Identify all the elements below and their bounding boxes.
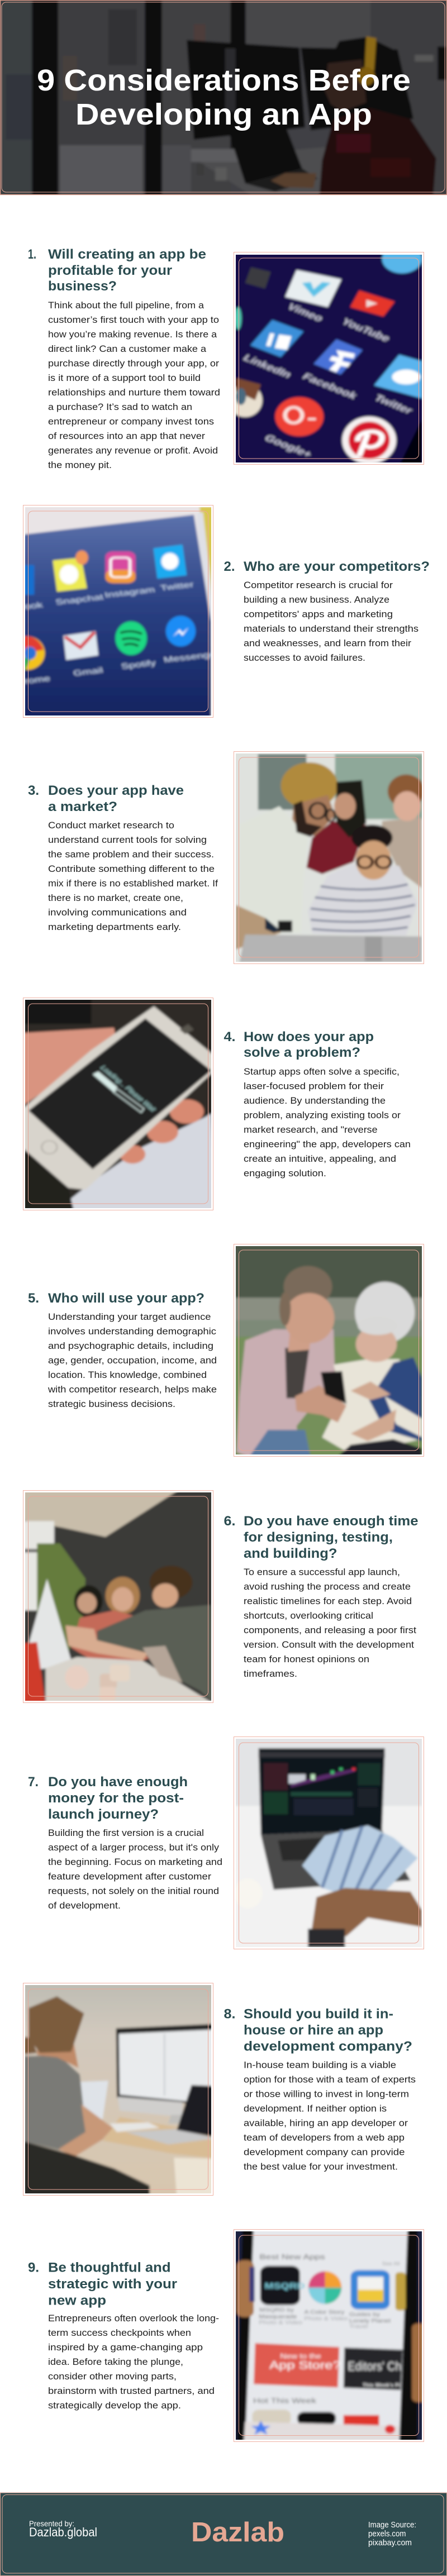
heading 1: Will creating an app be [48, 247, 206, 262]
photo 3: team around laptop [228, 750, 434, 965]
body text 8: In-house team building is a viable [244, 2060, 396, 2070]
body text 7: of development. [48, 1900, 121, 1911]
photo 9: App Store on phone: Guides by [349, 2312, 381, 2317]
body text 3: marketing departments early. [48, 922, 181, 932]
body text 2: successes to avoid failures. [244, 652, 365, 663]
photo 9: App Store on phone: A Color Story [304, 2310, 345, 2315]
body text 5: location. This knowledge, combined [48, 1370, 207, 1380]
body text 6: components, and releasing a poor first [244, 1625, 416, 1635]
image sources: pexels.com [368, 2529, 406, 2539]
body text 4: create an intuitive, appealing, and [244, 1153, 396, 1164]
photo 9: App Store on phone: Photo & Video [259, 2320, 302, 2325]
heading 3 [28, 783, 184, 814]
hero photo: developer at desk by window [0, 0, 447, 199]
body text 8: development. If neither option is [244, 2103, 387, 2114]
heading 9: strategic with your [48, 2277, 177, 2292]
body text 8: team of developers from a web app [244, 2133, 405, 2143]
item 5: audience [28, 1242, 434, 1458]
body text 8: available, hiring an app developer or [244, 2118, 408, 2128]
heading 2: Who are your competitors? [244, 559, 430, 574]
photo 1: social app icons on phone: Facebook [300, 371, 360, 401]
presented by: Presented by: [29, 2519, 74, 2528]
body text 1: how you’re making revenue. Is there a [48, 329, 217, 340]
heading 6: and building? [244, 1546, 337, 1561]
photo 2: tablet with app icons: Spotify [120, 658, 157, 671]
photo 2: tablet with app icons: Messenger [163, 649, 221, 664]
body text 6: realistic timelines for each step. Avoid [244, 1596, 412, 1606]
photo 2: tablet with app icons: Instagram [103, 585, 156, 599]
body text 4: Startup apps often solve a specific, [244, 1066, 400, 1077]
item 4: solve a problem [17, 996, 411, 1212]
photo 9: App Store on phone: Hot This Week [253, 2397, 316, 2405]
photo 1: social app icons on phone: Twitter [372, 393, 415, 416]
body text 5: Understanding your target audience [48, 1311, 211, 1322]
body text 7: aspect of a larger process, but it's only [48, 1842, 220, 1853]
heading 3: Does your app have [48, 783, 184, 798]
heading 7: Do you have enough [48, 1774, 188, 1790]
body text 1: purchase directly through your app, or [48, 358, 219, 369]
body text 2: and weaknesses, and learn from their [244, 638, 411, 648]
body text 1: a purchase? It’s sad to watch an [48, 402, 192, 412]
heading 7 [28, 1774, 188, 1822]
body text 7 [48, 1828, 222, 1911]
body text 2: competitors' apps and marketing [244, 609, 393, 619]
title [37, 64, 411, 131]
photo 9: App Store on phone [234, 2229, 424, 2442]
photo 2: tablet with app icons: Gmail [72, 666, 104, 678]
body text 7: the beginning. Focus on marketing and [48, 1857, 222, 1867]
heading 7: 7. [28, 1774, 39, 1790]
photo 9: App Store on phone: Masquerade [259, 2314, 297, 2320]
heading 6: Do you have enough time [244, 1514, 418, 1529]
body text 2 [244, 580, 419, 663]
heading 4: 4. [224, 1029, 236, 1044]
heading 1 [28, 247, 206, 294]
body text 3: Conduct market research to [48, 820, 174, 831]
heading 7: launch journey? [48, 1807, 159, 1822]
photo 1: social app icons on phone: YouTube [339, 317, 392, 344]
photo 2: tablet with app icons: Snapchat [55, 593, 104, 607]
body text 6: To ensure a successful app launch, [244, 1567, 400, 1577]
heading 1: profitable for your [48, 263, 172, 278]
photo 2: tablet with app icons: Twitter [159, 580, 195, 592]
photo 9: App Store on phone: Editors' Ch [348, 2360, 401, 2373]
item 8: in-house or hire [17, 1981, 416, 2197]
photo 9: App Store on phone: Lonely Planet [349, 2318, 391, 2324]
heading 9: Be thoughtful and [48, 2260, 171, 2276]
body text 6: version. Consult with the development [244, 1639, 414, 1650]
body text 9: inspired by a game-changing app [48, 2342, 203, 2353]
body text 1: entrepreneur or company invest tons [48, 416, 214, 427]
image sources: pixabay.com [368, 2538, 412, 2548]
body text 3: Contribute something different to the [48, 864, 215, 874]
image sources: Image Source: [368, 2520, 416, 2530]
logo: Dazlab [191, 2517, 284, 2548]
item 7: money [28, 1735, 434, 1949]
photo 2: tablet with app icons: rome [23, 674, 51, 685]
title: 9 Considerations Before [37, 64, 411, 97]
body text 6: timeframes. [244, 1668, 297, 1679]
body text 9: consider other moving parts, [48, 2371, 177, 2382]
photo 1: social app icons on phone: LinkedIn [241, 353, 294, 380]
heading 3: 3. [28, 783, 39, 798]
body text 5: involves understanding demographic [48, 1326, 217, 1337]
photo 9: App Store on phone: MSQRD by [259, 2307, 294, 2313]
heading 8: house or hire an app [244, 2023, 383, 2038]
heading 6: for designing, testing, [244, 1530, 393, 1545]
body text 5: strategic business decisions. [48, 1399, 175, 1409]
body text 4 [244, 1066, 411, 1179]
photo 7: laptop with trading chart and banknotes [228, 1735, 434, 1949]
body text 8: option for those with a team of experts [244, 2074, 416, 2084]
body text 7: Building the first version is a crucial [48, 1828, 204, 1838]
body text 1: direct link? Can a customer make a [48, 344, 207, 354]
item 9: be thoughtful [28, 2225, 434, 2446]
body text 4: problem, analyzing existing tools or [244, 1110, 401, 1120]
heading 8: Should you build it in- [244, 2006, 393, 2022]
photo 6: coworkers at desk in dark office [17, 1487, 222, 1705]
heading 3: a market? [48, 799, 117, 814]
presented by: Dazlab.global [29, 2525, 97, 2539]
body text 3: the same problem and their success. [48, 849, 214, 860]
body text 9: brainstorm with trusted partners, and [48, 2386, 215, 2396]
body text 2: Competitor research is crucial for [244, 580, 393, 590]
title: Developing an App [75, 98, 372, 131]
photo 4: hand holding phone loading [17, 996, 222, 1212]
body text 6: avoid rushing the process and create [244, 1581, 411, 1592]
body text 7: requests, not solely on the initial round [48, 1886, 219, 1896]
body text 1: is it more of a support tool to build [48, 373, 201, 383]
footer panel [0, 2493, 447, 2576]
photo 9: App Store on phone: Best New Apps [259, 2253, 325, 2261]
body text 7: feature development after customer [48, 1871, 211, 1882]
heading 6 [224, 1514, 418, 1561]
presented by [29, 2519, 97, 2539]
body text 1: the money pit. [48, 460, 112, 470]
photo 2: tablet with app icons [23, 505, 213, 718]
heading 9: new app [48, 2293, 106, 2308]
body text 3 [48, 820, 218, 932]
item 2: competitors [9, 503, 430, 721]
body text 6: team for honest opinions on [244, 1654, 369, 1664]
body text 1: relationships and nurture them toward [48, 387, 220, 398]
body text 2: materials to understand their strengths [244, 623, 419, 634]
heading 9: 9. [28, 2260, 39, 2276]
body text 3: involving communications and [48, 907, 187, 918]
heading 4 [224, 1029, 374, 1060]
photo 1: social app icons on phone: Vimeo [285, 302, 326, 323]
photo 9: App Store on phone: New to the [280, 2353, 321, 2360]
body text 4: audience. By understanding the [244, 1095, 386, 1106]
photo 9: App Store on phone: Photo & Video [304, 2316, 348, 2322]
heading 6: 6. [224, 1514, 236, 1529]
body text 9: Entrepreneurs often overlook the long- [48, 2313, 219, 2324]
item 6: time [17, 1487, 418, 1705]
photo 8: man at desk with monitor and laptops [17, 1981, 222, 2197]
photo 1: social app icons on phone: Google+ [262, 433, 315, 460]
heading 4: solve a problem? [244, 1045, 360, 1060]
heading 8: 8. [224, 2006, 236, 2022]
heading 7: money for the post- [48, 1791, 184, 1806]
body text 1: customer’s first touch with your app to [48, 314, 219, 325]
body text 6: shortcuts, overlooking critical [244, 1610, 373, 1621]
photo 9: App Store on phone: Travel [349, 2324, 368, 2329]
hero banner [0, 0, 447, 199]
photo 1: social app icons on phone [228, 244, 427, 468]
photo 2: tablet with app icons: ook [23, 600, 44, 611]
heading 2: 2. [224, 559, 235, 574]
body text 8: or those willing to invest in long-term [244, 2089, 409, 2099]
photo 5: two women with smartphone [228, 1242, 434, 1458]
body text 4: engaging solution. [244, 1168, 326, 1179]
heading 8: development company? [244, 2039, 412, 2054]
photo 9: App Store on phone: MSQRD [264, 2281, 305, 2291]
body text 9: term success checkpoints when [48, 2327, 191, 2338]
item 1: profitability [28, 244, 427, 470]
body text 4: engineering" the app, developers can [244, 1139, 411, 1149]
item 3: market [28, 750, 434, 965]
body text 8: the best value for your investment. [244, 2162, 398, 2172]
body text 1 [48, 300, 220, 470]
body text 3: understand current tools for solving [48, 834, 207, 845]
body text 6 [244, 1567, 416, 1679]
body text 8: development company can provide [244, 2147, 405, 2157]
body text 4: market research, and "reverse [244, 1124, 378, 1135]
heading 5: Who will use your app? [48, 1291, 205, 1306]
body text 8 [244, 2060, 416, 2172]
body text 5: and psychographic details, including [48, 1341, 213, 1351]
body text 3: mix if there is no established market. If [48, 878, 218, 889]
body text 2: building a new business. Analyze [244, 594, 389, 605]
body text 5 [47, 1311, 217, 1409]
heading 1: 1. [28, 247, 36, 262]
body text 5: age, gender, occupation, income, and [48, 1355, 217, 1366]
body text 1: of resources into an app that never [48, 431, 205, 441]
body text 4: laser-focused problem for their [244, 1081, 384, 1091]
heading 1: business? [48, 279, 117, 294]
photo 9: App Store on phone: See All [382, 2262, 400, 2266]
photo 9: App Store on phone: This Week's Pi [363, 2383, 401, 2388]
image sources [368, 2520, 416, 2548]
body text 9 [48, 2313, 219, 2411]
body text 3: there is no market, create one, [48, 893, 183, 903]
body text 1: generates any revenue or profit. Avoid [48, 445, 218, 456]
photo 4: hand holding phone loading: Loading... Please Wait [98, 1065, 159, 1113]
heading 5: 5. [28, 1291, 39, 1306]
body text 9: idea. Before taking the plunge, [48, 2356, 183, 2367]
heading 9 [28, 2260, 177, 2308]
body text 1: Think about the full pipeline, from a [48, 300, 205, 311]
heading 4: How does your app [244, 1029, 374, 1044]
heading 8 [224, 2006, 412, 2054]
body text 5: with competitor research, helps make [47, 1384, 217, 1395]
body text 9: strategically develop the app. [48, 2400, 181, 2411]
photo 9: App Store on phone: App Store? [269, 2359, 341, 2372]
